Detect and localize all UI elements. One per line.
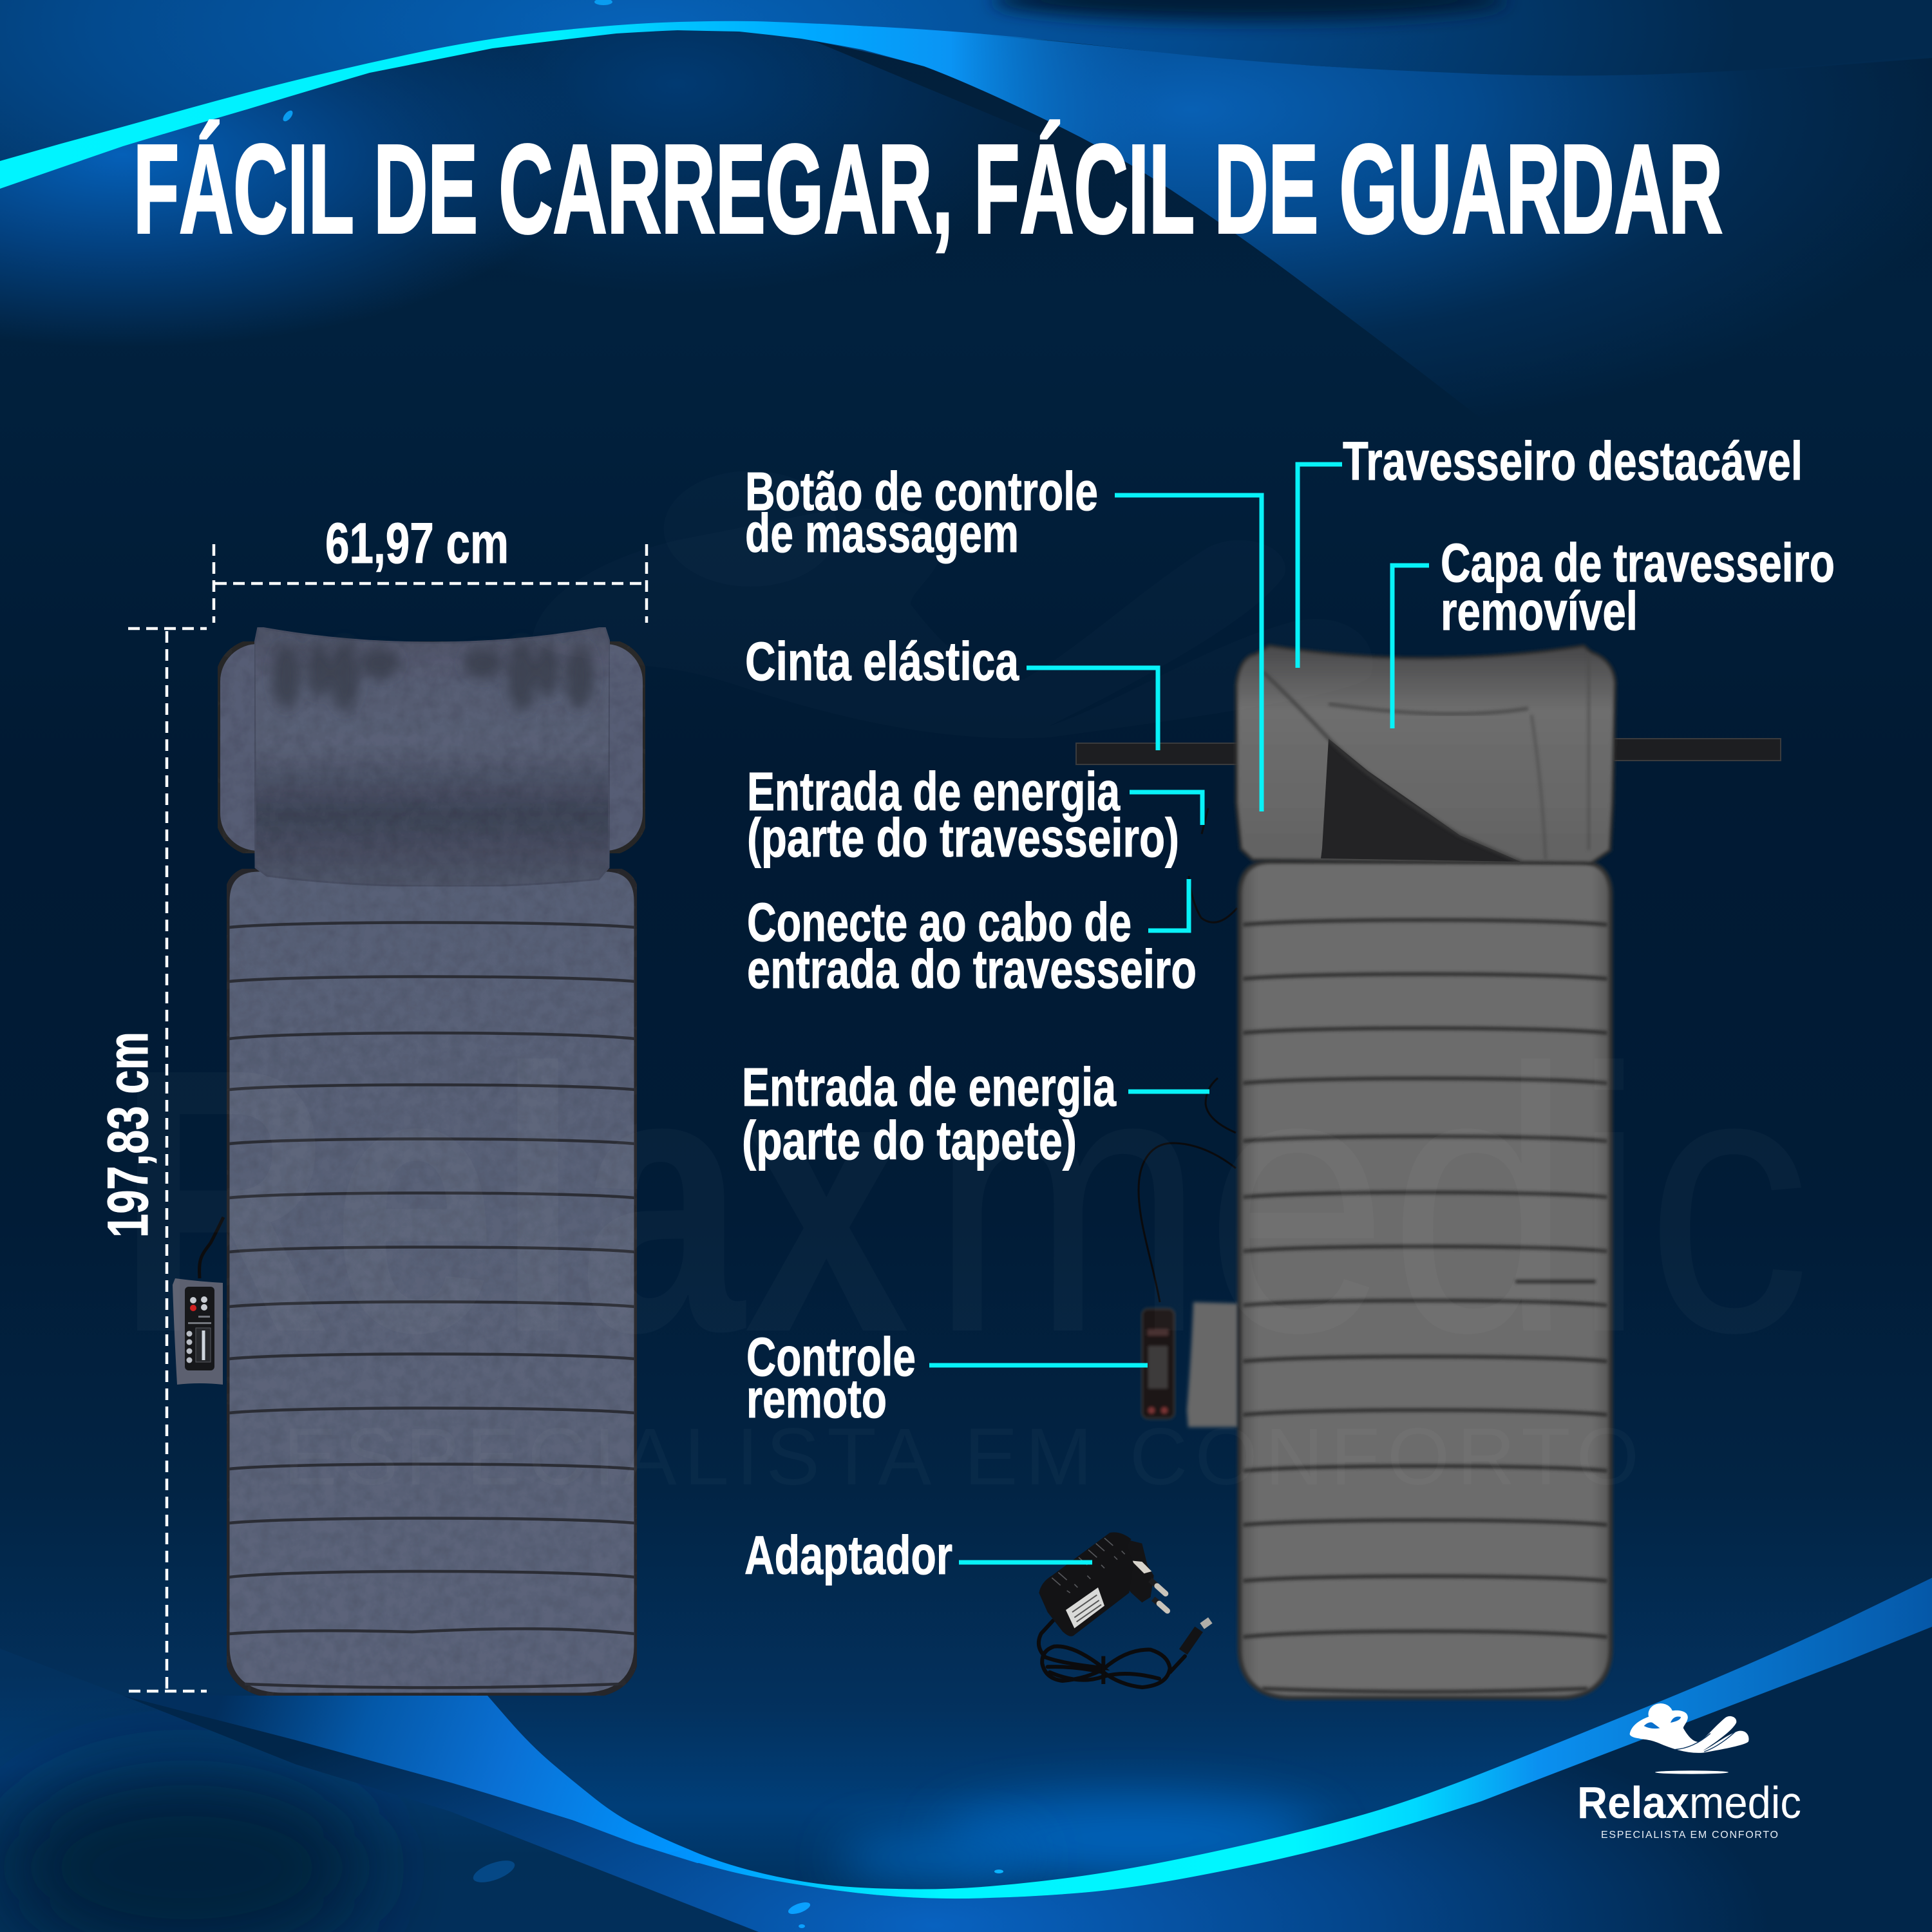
tagline: ESPECIALISTA EM CONFORTO <box>1601 1830 1778 1841</box>
elastic strap left <box>1076 743 1241 764</box>
width dimension lines <box>214 544 647 623</box>
label: controle remoto: remoto <box>746 1368 887 1429</box>
mat cable <box>200 1217 223 1278</box>
logo: Relaxmedic <box>1577 1703 1801 1841</box>
vents <box>1052 1538 1125 1593</box>
label: entrada mat: (parte do tapete) <box>742 1110 1077 1171</box>
watermark over mats <box>117 471 1811 1502</box>
lower left blue area <box>0 1649 759 1932</box>
label: conecte: entrada do travesseiro <box>747 939 1197 999</box>
label: entrada mat: Entrada de energia <box>742 1057 1117 1117</box>
elastic strap right <box>1614 739 1781 761</box>
glow inside lower curve <box>837 1800 1327 1881</box>
adapter <box>1039 1532 1210 1687</box>
panel: right mat <box>1076 646 1781 1698</box>
label: cinta elastica: Cinta elástica <box>745 631 1019 692</box>
barrel connector <box>1183 1629 1199 1652</box>
label: travesseiro destacavel: Travesseiro destacável <box>1343 431 1803 491</box>
pillow zipper <box>1421 660 1425 692</box>
inner pillow crease <box>1329 704 1528 714</box>
line: entrada mat <box>1128 1090 1209 1094</box>
line: entrada pillow <box>1130 792 1202 825</box>
height label: 197,83 cm <box>95 1032 160 1238</box>
callout lines <box>929 464 1429 1562</box>
remote right <box>1142 1309 1175 1419</box>
pillow cover <box>254 627 610 886</box>
cable tie <box>1097 1656 1109 1684</box>
label: botao de controle: Botão de controle <box>745 461 1098 522</box>
power cord mat side <box>1206 1078 1236 1133</box>
watermark: logo figure <box>533 471 1373 738</box>
label: adaptador: Adaptador <box>744 1525 952 1586</box>
open cover dark interior <box>1321 739 1520 862</box>
label: entrada mat <box>742 1057 1117 1171</box>
pillow base <box>218 641 645 853</box>
label: conecte: Conecte ao cabo de <box>747 892 1132 952</box>
wordmark: Relaxmedic <box>1577 1777 1801 1828</box>
remote pouch <box>173 1278 223 1385</box>
label: capa de travesseiro: removível <box>1441 581 1638 641</box>
label: capa de travesseiro <box>1441 533 1835 641</box>
line: botao de controle <box>1115 495 1262 811</box>
remote control <box>185 1287 214 1370</box>
light specks <box>281 0 1003 1928</box>
watermark: brand <box>117 990 1811 1410</box>
area below lower curve <box>123 1627 1932 1932</box>
watermark: tagline: ESPECIALISTA EM CONFORTO <box>283 1412 1639 1502</box>
label: conecte <box>747 892 1197 999</box>
height dimension lines <box>128 629 207 1691</box>
cover right edge <box>1531 654 1589 860</box>
label: entrada pillow <box>747 761 1179 868</box>
mat seams <box>229 922 635 1687</box>
mat body <box>227 869 637 1696</box>
pins <box>1150 1580 1157 1586</box>
watermark: brand: medic <box>930 990 1811 1410</box>
adapter label <box>1066 1587 1104 1628</box>
pillow body <box>1236 646 1615 863</box>
panel: left mat with dimensions <box>95 511 647 1696</box>
mat seams right <box>1243 920 1607 1692</box>
label: entrada pillow: (parte do travesseiro) <box>747 808 1179 868</box>
cover flap shadow <box>1263 672 1520 862</box>
bottom cyan wave <box>667 1578 1932 1899</box>
mat body right <box>1240 862 1611 1698</box>
plug <box>1121 1539 1154 1602</box>
icon: relaxing figure <box>1630 1703 1749 1753</box>
width label: 61,97 cm <box>325 511 509 575</box>
pillow bottom fold <box>1253 853 1520 858</box>
pillow cover mottling <box>272 641 594 712</box>
pillow right <box>1236 646 1615 863</box>
watermark: brand: Relax <box>117 990 911 1410</box>
label: botao de controle: de massagem <box>745 503 1019 564</box>
line: adaptador <box>959 1560 1092 1565</box>
label: botao de controle <box>745 461 1098 564</box>
adapter cable <box>1039 1621 1185 1687</box>
label: entrada pillow: Entrada de energia <box>747 761 1121 822</box>
plug tab <box>1132 1560 1151 1573</box>
side pouch <box>1187 1302 1238 1427</box>
line: controle remoto <box>929 1363 1148 1368</box>
flare wedge lower left <box>123 1696 715 1863</box>
line: travesseiro destacavel <box>1298 464 1342 668</box>
line: cinta elastica <box>1027 668 1158 750</box>
label: controle remoto <box>746 1327 916 1429</box>
label: controle remoto: Controle <box>746 1327 916 1387</box>
line: conecte <box>1148 879 1189 931</box>
line: capa de travesseiro <box>1392 565 1429 728</box>
top cyan wave <box>0 21 1170 189</box>
logo shadow <box>1655 1770 1728 1774</box>
remote cable <box>1139 1143 1236 1302</box>
power brick <box>1039 1532 1133 1636</box>
pillow power cord <box>1189 808 1237 922</box>
